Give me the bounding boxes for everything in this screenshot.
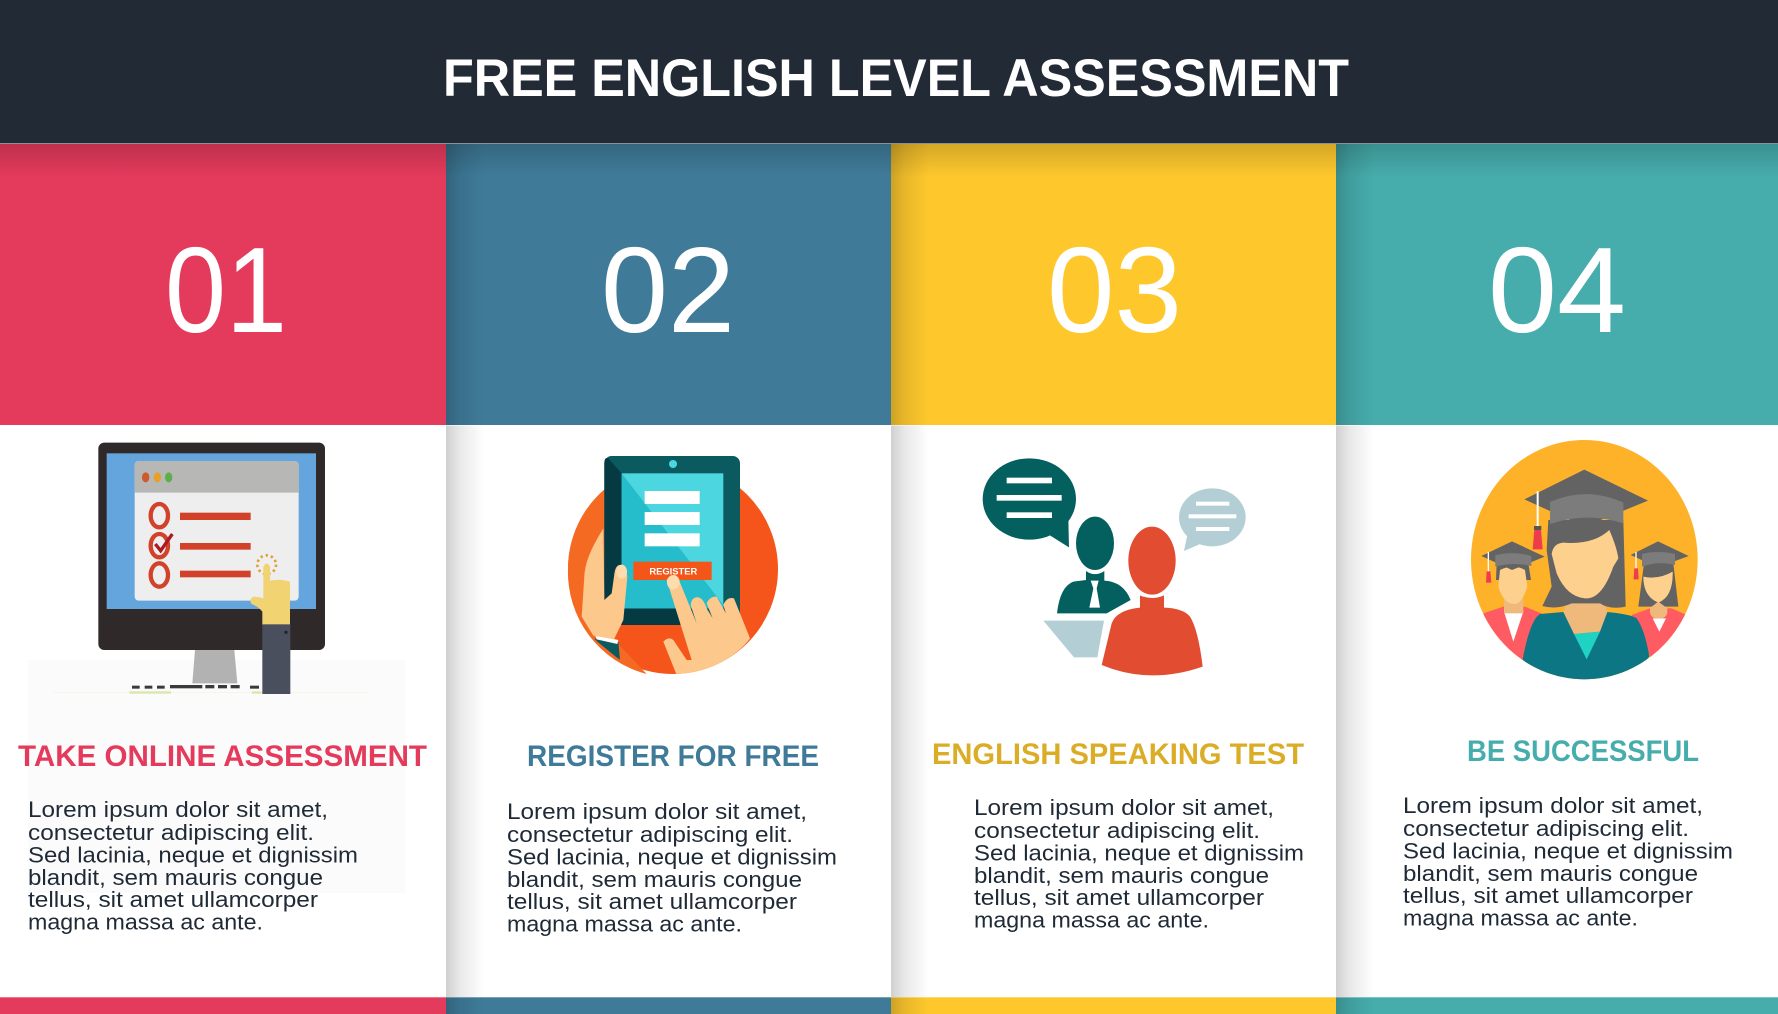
text block: step 3: tellus, sit amet ullamcorper [974, 885, 1264, 910]
panel: step 3 [891, 143, 1336, 1014]
text block: step 1: magna massa ac ante. [28, 910, 263, 934]
panel: step 2 [446, 143, 891, 1014]
text block: step 1 [28, 797, 358, 934]
text block: step 3 [974, 795, 1304, 932]
left graduate [1481, 541, 1545, 663]
text block: step 2: Lorem ipsum dolor sit amet, [507, 799, 807, 824]
heading: step 1: TAKE ONLINE ASSESSMENT [18, 740, 427, 773]
text block: step 2: consectetur adipiscing elit. [507, 822, 793, 847]
heading: step 3: ENGLISH SPEAKING TEST [932, 738, 1304, 771]
text block: step 3: consectetur adipiscing elit. [974, 818, 1260, 843]
number 03: 03 [1047, 222, 1182, 358]
heading: step 4: BE SUCCESSFUL [1467, 735, 1699, 768]
text block: step 2: blandit, sem mauris congue [507, 867, 802, 892]
right graduate [1631, 541, 1689, 660]
header bar [0, 0, 1778, 144]
text block: step 1: blandit, sem mauris congue [28, 865, 323, 890]
text block: step 3: magna massa ac ante. [974, 908, 1209, 932]
text block: step 3: blandit, sem mauris congue [974, 863, 1269, 888]
text block: step 4: Lorem ipsum dolor sit amet, [1403, 793, 1703, 818]
text block: step 4: consectetur adipiscing elit. [1403, 816, 1689, 841]
title: FREE ENGLISH LEVEL ASSESSMENT [443, 49, 1349, 108]
heading: step 2: REGISTER FOR FREE [527, 740, 819, 773]
text block: step 1: consectetur adipiscing elit. [28, 820, 314, 845]
text block: step 2: magna massa ac ante. [507, 912, 742, 936]
text block: step 2: Sed lacinia, neque et dignissim [507, 844, 837, 870]
number 02: 02 [601, 222, 735, 358]
text block: step 4: Sed lacinia, neque et dignissim [1403, 838, 1733, 864]
text block: step 1: Lorem ipsum dolor sit amet, [28, 797, 328, 822]
icon: tablet registration [568, 456, 778, 675]
text block: step 3: Lorem ipsum dolor sit amet, [974, 795, 1274, 820]
icon: graduates [1471, 440, 1698, 690]
panel: step 4 [1336, 143, 1778, 1014]
text block: step 4: blandit, sem mauris congue [1403, 861, 1698, 886]
icon: computer with online test [53, 443, 368, 694]
number 01: 01 [165, 222, 287, 358]
text block: step 2 [507, 799, 837, 936]
number 04: 04 [1488, 222, 1626, 358]
text block: step 4: tellus, sit amet ullamcorper [1403, 883, 1693, 908]
panel: step 1 [0, 143, 446, 1014]
icon: speaking test people [983, 458, 1246, 675]
text block: step 4: magna massa ac ante. [1403, 906, 1638, 930]
text block: step 2: tellus, sit amet ullamcorper [507, 889, 797, 914]
text block: step 4 [1403, 793, 1733, 930]
text block: step 3: Sed lacinia, neque et dignissim [974, 840, 1304, 866]
text block: step 1: tellus, sit amet ullamcorper [28, 887, 318, 912]
center graduate [1523, 470, 1649, 690]
icon: tablet registration: REGISTER [649, 566, 698, 576]
text block: step 1: Sed lacinia, neque et dignissim [28, 842, 358, 868]
